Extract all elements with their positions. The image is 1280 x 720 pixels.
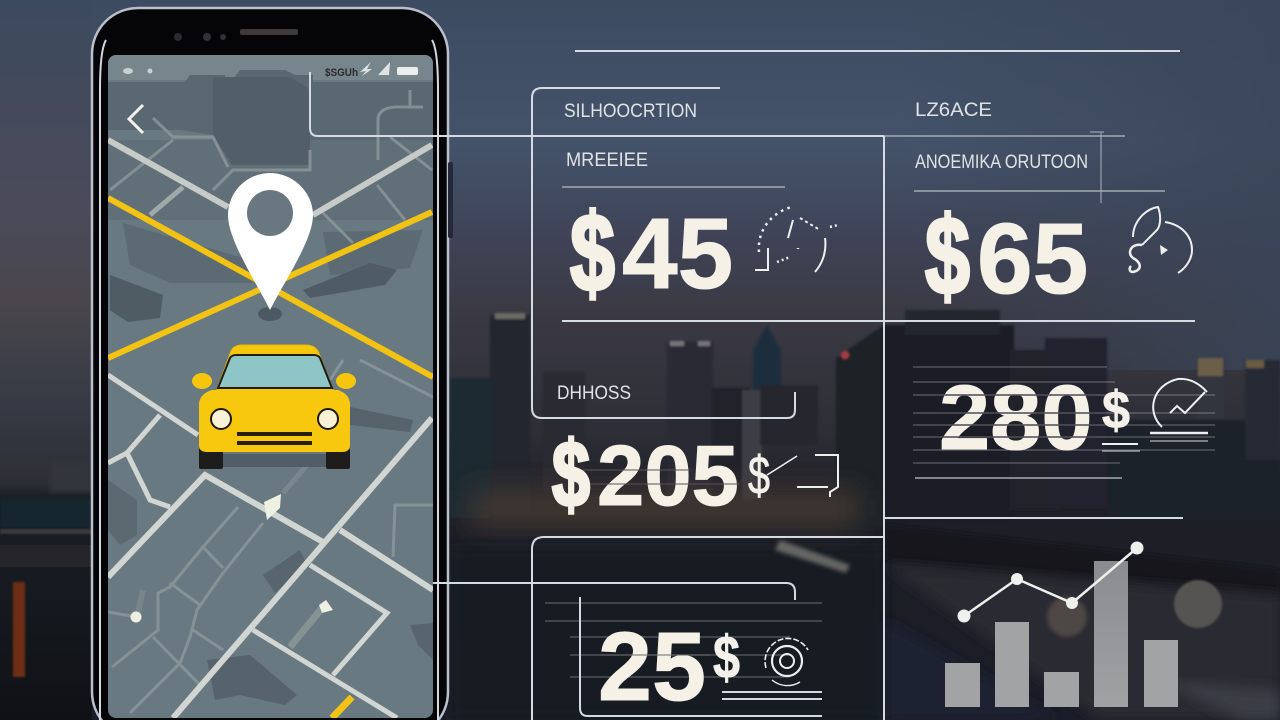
price: 280 — [939, 367, 1092, 469]
price: 65 — [977, 203, 1088, 315]
panel: price 205 — [552, 422, 838, 526]
price: $ — [925, 195, 970, 318]
map screen — [108, 55, 433, 718]
price: $ — [552, 422, 590, 526]
icon: bracket — [767, 455, 838, 497]
stripes over numerals — [583, 470, 740, 484]
inner frame — [580, 597, 822, 716]
connector lines — [310, 51, 1195, 720]
grille — [237, 432, 312, 445]
side button — [448, 162, 453, 238]
city skyline — [450, 310, 1280, 530]
icon: gauge — [755, 207, 838, 272]
stripes over numerals — [600, 654, 710, 656]
map: white streets — [108, 140, 433, 718]
trend line — [958, 542, 1144, 622]
sub-label: MREEIEE — [566, 149, 648, 171]
camera and speaker — [174, 29, 298, 41]
label: DHHOSS — [557, 382, 631, 404]
road glow — [450, 490, 1280, 720]
map: faint streets — [108, 90, 433, 713]
status bar — [123, 62, 418, 79]
status bar: $SGUh — [325, 67, 358, 79]
left road details — [0, 462, 92, 677]
bars — [945, 561, 1178, 707]
icon: location pin — [228, 173, 313, 321]
panel: price 25 — [532, 537, 884, 720]
stripes over numerals — [935, 395, 1095, 437]
sub-label: ANOEMIKA ORUTOON — [915, 151, 1088, 173]
dollar sign: $ — [748, 446, 770, 506]
icon: trend gauge — [1102, 379, 1208, 451]
dollar sign: $ — [1102, 381, 1130, 440]
stripes — [545, 603, 822, 677]
chart: bars and trend line — [885, 518, 1183, 707]
price: $ — [570, 192, 615, 315]
icon: target — [765, 638, 808, 686]
icon: yellow taxi — [192, 345, 356, 469]
icon: timer — [1130, 207, 1192, 273]
price: 25 — [598, 612, 706, 720]
wheels — [199, 448, 350, 469]
roof — [216, 345, 334, 392]
price: 45 — [622, 198, 733, 310]
bezel highlight — [100, 40, 438, 720]
price: 205 — [597, 429, 739, 524]
mirrors — [192, 373, 356, 389]
car shadow — [223, 454, 326, 467]
heading: LZ6ACE — [915, 99, 992, 121]
panel frame — [532, 537, 884, 720]
stripes — [913, 367, 1215, 463]
panel: subscription — [532, 88, 838, 418]
map: dark blocks — [108, 55, 433, 705]
phone — [92, 8, 453, 720]
map: small markers — [130, 494, 333, 622]
heading: SILHOOCRTION — [564, 100, 697, 122]
back arrow — [129, 105, 143, 133]
dollar sign: $ — [713, 624, 740, 691]
map: yellow routes — [108, 198, 433, 718]
body — [199, 390, 350, 452]
headlights — [211, 409, 338, 429]
panel: price 280 — [913, 367, 1215, 478]
panel frame — [532, 88, 795, 418]
phone body — [92, 8, 448, 720]
windshield — [218, 355, 332, 388]
panel: usage — [914, 99, 1192, 318]
